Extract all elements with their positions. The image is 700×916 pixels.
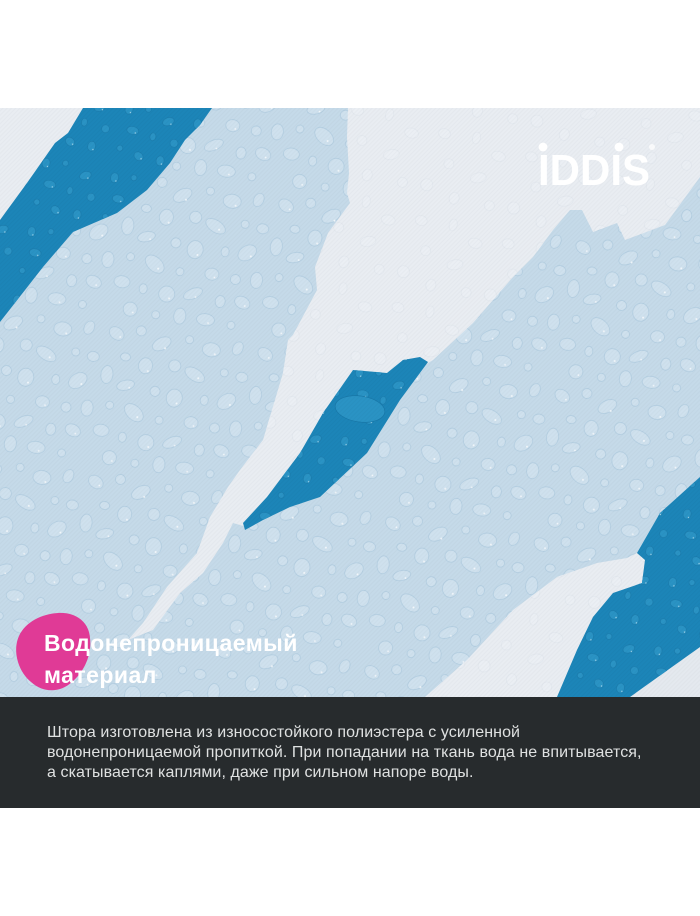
blue stripe bottom right [557,477,700,697]
fabric weave texture [0,108,700,697]
white central stripe [128,108,700,640]
blue stripe top left [0,108,212,322]
white corner bottom right [630,647,700,697]
white stripe bottom right [425,553,645,697]
logo: IDDIS: IDDIS [538,146,650,195]
description panel [0,696,700,808]
blue patch centre [243,357,428,530]
pink blob [16,613,90,690]
description text: Штора изготовлена из износостойкого полиэстера с усиленной [47,724,520,740]
heading: Водонепроницаемый [44,630,298,656]
heading [44,630,298,688]
heading: материал [44,662,157,688]
description text: водонепроницаемой пропиткой. При попадании на ткань вода не впитывается, [47,744,642,760]
large drop on blue patch [333,393,387,425]
description text [47,724,642,780]
photo: wet shower curtain fabric [0,108,700,697]
description text: а скатывается каплями, даже при сильном напоре воды. [47,764,474,780]
white stripe top left [0,108,83,220]
light blue fabric base [0,108,700,697]
